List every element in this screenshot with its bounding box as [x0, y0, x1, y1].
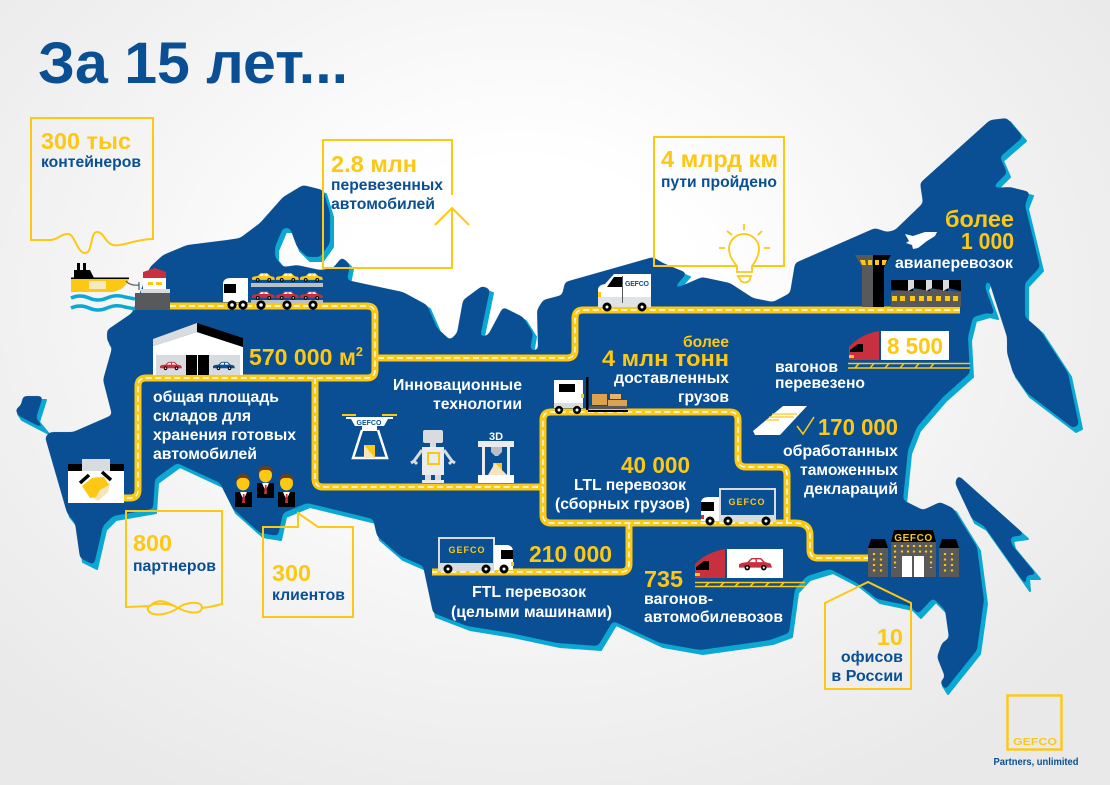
text: FTL shipments: FTL перевозок [472, 584, 586, 601]
icon: GEFCO office [868, 530, 959, 577]
text: FTL shipments [451, 541, 612, 621]
text: more than 4 million tonnes: 4 млн тонн [602, 346, 729, 371]
icon: LTL truck: GEFCO [728, 497, 766, 507]
text: warehouse description [153, 389, 296, 463]
callout: 4 billion km: 4 млрд км [661, 146, 778, 172]
callout: 2.8 million cars: автомобилей [331, 196, 435, 213]
text: wagons transported [775, 359, 865, 392]
railway track [848, 364, 970, 368]
title: За 15 лет... [38, 31, 348, 96]
icon: delivery van: GEFCO [625, 281, 650, 288]
icon: train with 8 500 wagon: 8 500 [887, 333, 943, 359]
callout: 10 offices [825, 582, 911, 689]
text: more than 4 million tonnes [602, 334, 729, 406]
text: 735 car wagons: 735 [644, 566, 683, 592]
text: 735 car wagons: вагонов- [644, 591, 713, 608]
callout: 10 offices: в России [831, 668, 903, 685]
text: FTL shipments: 210 000 [529, 541, 612, 567]
icon: 3D printer: 3D [489, 431, 503, 443]
text: customs declarations: таможенных [800, 462, 898, 479]
text: wagons transported: перевезено [775, 375, 865, 392]
text: 735 car wagons: автомобилевозов [644, 609, 783, 626]
text: more than 4 million tonnes: грузов [678, 389, 729, 406]
text: warehouse description: складов для [153, 408, 251, 425]
icon: GEFCO office: GEFCO [894, 533, 933, 544]
text: more than 1000 air shipments: более [945, 206, 1014, 232]
callout: 300 thousand containers: 300 тыс [41, 128, 131, 154]
icon: warehouse [153, 323, 243, 375]
text: customs declarations [783, 414, 898, 498]
text: innovative technologies: технологии [433, 396, 522, 413]
text: more than 4 million tonnes: доставленных [614, 370, 729, 387]
callout: 800 partners: 800 [133, 530, 172, 556]
icon: FTL truck: GEFCO [448, 545, 486, 555]
icon: train with 8 500 wagon [849, 331, 949, 360]
text: 735 car wagons [644, 566, 783, 626]
logo: GEFCO: Partners, unlimited [994, 757, 1078, 768]
icon: port terminal [126, 268, 170, 310]
icon: LTL truck [701, 489, 776, 524]
callout: 300 thousand containers: контейнеров [41, 154, 141, 171]
text: more than 1000 air shipments: авиаперевозок [895, 255, 1013, 272]
map of Russia [15, 118, 1082, 694]
callout: 300 thousand containers [31, 118, 153, 253]
text: customs declarations: деклараций [804, 481, 898, 498]
icon: three clients [235, 466, 295, 507]
text: wagons transported: вагонов [775, 359, 838, 376]
text: innovative technologies [393, 377, 522, 413]
icon: delivery van [598, 274, 651, 310]
text: customs declarations: обработанных [783, 443, 898, 460]
logo: GEFCO: GEFCO [1013, 736, 1057, 748]
callout: 300 clients: клиентов [272, 587, 345, 604]
callout: 300 clients: 300 [272, 560, 311, 586]
callout: 4 billion km [654, 137, 784, 282]
callout: 10 offices: 10 [877, 624, 903, 650]
text: more than 1000 air shipments: 1 000 [961, 228, 1014, 254]
logo: GEFCO [994, 696, 1078, 768]
text: LTL shipments [555, 452, 690, 513]
text: LTL shipments: (сборных грузов) [555, 496, 690, 513]
icon: drone [342, 414, 397, 458]
icon: car transporter truck [223, 273, 323, 308]
text: more than 4 million tonnes: более [683, 334, 729, 351]
icon: 3D printer [478, 431, 514, 483]
text: FTL shipments: (целыми машинами) [451, 604, 612, 621]
big number: warehouse area: 2 [356, 344, 363, 359]
callout: 2.8 million cars: перевезенных [331, 177, 443, 194]
icon: handshake briefcase [68, 459, 124, 503]
text: innovative technologies: Инновационные [393, 377, 522, 394]
icon: drone: GEFCO [357, 420, 382, 427]
callout: 2.8 million cars [323, 140, 469, 268]
callout: 4 billion km: пути пройдено [661, 174, 777, 191]
text: warehouse description: общая площадь [153, 389, 279, 406]
callout: 2.8 million cars: 2.8 млн [331, 151, 417, 177]
callout: 10 offices: офисов [841, 649, 903, 666]
icon: customs documents [753, 406, 814, 435]
icon: light bulb [719, 224, 770, 282]
icon: container ship [71, 263, 135, 310]
icon: airport tower [855, 255, 891, 307]
text: warehouse description: автомобилей [153, 446, 257, 463]
callout: 800 partners [126, 511, 222, 614]
railway track [695, 582, 805, 586]
callout: 300 clients [263, 513, 353, 617]
icon: FTL truck [438, 538, 514, 572]
text: LTL shipments: LTL перевозок [574, 477, 686, 494]
text: customs declarations: 170 000 [818, 414, 898, 440]
icon: airport hangar [891, 280, 961, 307]
callout: 800 partners: партнеров [133, 558, 216, 575]
icon: car-carrier train [695, 549, 783, 578]
road network [124, 306, 960, 572]
icon: robot [411, 430, 455, 483]
big number: warehouse area: 570 000 м [249, 344, 358, 370]
text: LTL shipments: 40 000 [621, 452, 690, 478]
text: more than 1000 air shipments [895, 206, 1014, 272]
icon: airplane [905, 232, 937, 249]
text: warehouse description: хранения готовых [153, 427, 296, 444]
icon: forklift truck with pallet [554, 377, 628, 413]
